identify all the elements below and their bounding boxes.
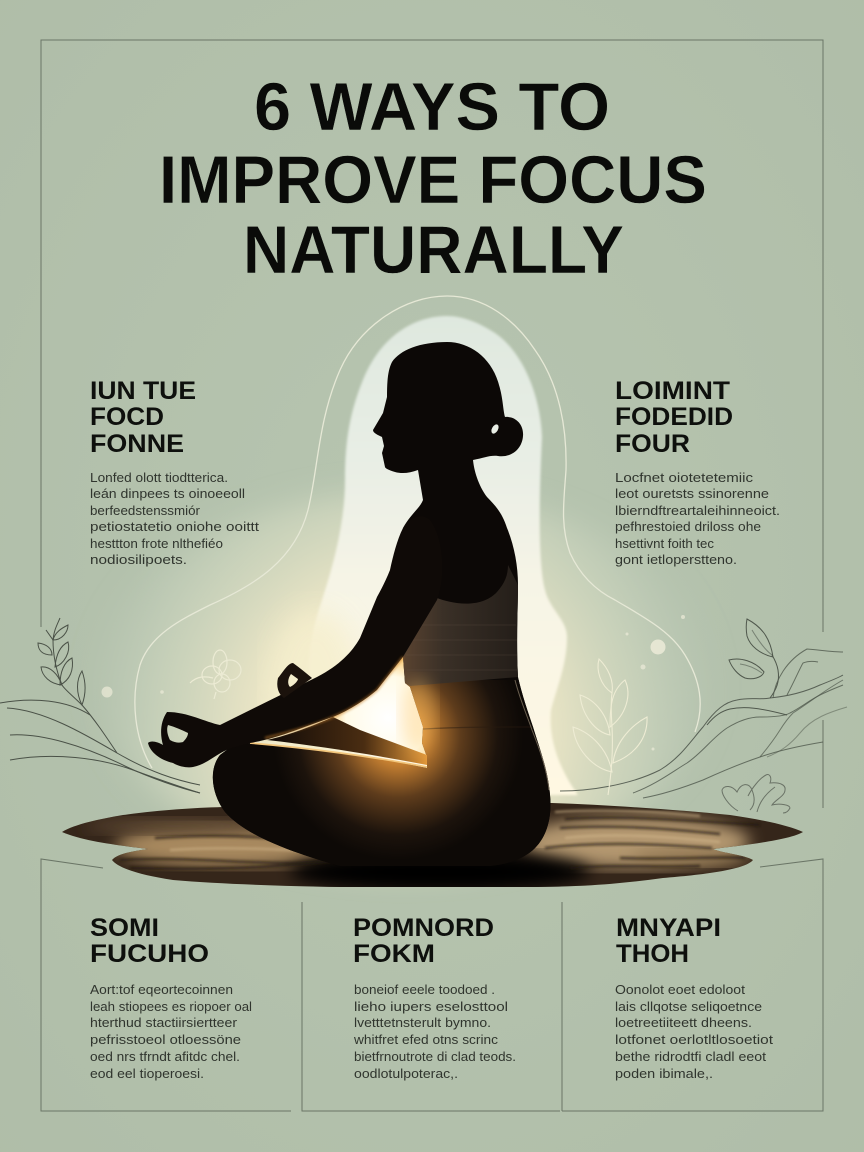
body text: petiostatetio oniohe ooittt (90, 520, 260, 534)
heading: THOH (616, 940, 689, 968)
body text: nodiosilipoets. (90, 553, 187, 567)
arm glow edge (265, 657, 403, 738)
bright rim on leg (250, 743, 427, 767)
heading: FODEDID (615, 403, 733, 431)
body text: bethe ridrodtfi cladl eeot (615, 1050, 767, 1064)
panel: top left text (90, 377, 260, 567)
body text: Locfnet oiotetetemiic (615, 471, 753, 485)
body text: boneiof eeele toodoed . (354, 983, 495, 997)
heading (90, 914, 209, 968)
back rim light (515, 680, 549, 790)
heading: FOUR (615, 430, 690, 458)
body text (353, 983, 516, 1081)
body text: lieho iupers eselosttool (354, 1000, 508, 1014)
body text: pefhrestoied driloss ohe (615, 520, 761, 534)
title (159, 69, 707, 288)
title: IMPROVE FOCUS (159, 142, 707, 218)
body text: oed nrs tfrndt afitdc chel. (90, 1050, 240, 1064)
heading: FONNE (90, 430, 184, 458)
thigh wedge (267, 717, 427, 765)
small shrub (722, 775, 790, 813)
body text: Aort:tof eqeortecoinnen (90, 983, 233, 997)
body text: oodlotulpoterac,. (354, 1067, 458, 1081)
lit waist and hips (212, 680, 550, 860)
halo behind head (308, 316, 578, 795)
panel: bottom right (615, 914, 774, 1081)
heading (353, 914, 494, 968)
body text: lbierndftreartaleihinneoict. (615, 504, 780, 518)
heading: POMNORD (353, 914, 494, 942)
body text: lvetttetnsterult bymno. (354, 1016, 491, 1030)
body text: berfeedstenssmiór (90, 504, 200, 518)
outer halo outline (135, 296, 700, 768)
body text: hterthud stactiirsiertteer (90, 1016, 237, 1030)
panel: bottom middle (353, 914, 516, 1081)
waistband (423, 727, 532, 729)
body text: whitfret efed otns scrinc (353, 1033, 498, 1047)
back hand (277, 663, 312, 698)
title: 6 WAYS TO (254, 69, 610, 145)
body text: lotfonet oerlotltlosoetiot (615, 1033, 774, 1047)
heading: FUCUHO (90, 940, 209, 968)
body text: hesttton frote nlthefiéo (90, 537, 223, 551)
background glow (95, 490, 715, 870)
soft glow left of halo (267, 610, 363, 800)
bun gap (490, 423, 500, 435)
body text: leot ouretsts ssinorenne (615, 487, 769, 501)
heading (615, 377, 733, 458)
heading: MNYAPI (616, 914, 721, 942)
body text: loetreetiiteett dheens. (615, 1016, 752, 1030)
body text: Lonfed olott tiodtterica. (90, 471, 228, 485)
top texture (406, 625, 517, 670)
head, torso and legs (213, 342, 550, 866)
body text: Oonolot eoet edoloot (615, 983, 746, 997)
title: NATURALLY (243, 212, 624, 288)
body text: pefrisstoeol otloessöne (90, 1033, 241, 1047)
body text (90, 471, 260, 567)
silhouette of meditating woman (148, 342, 560, 870)
yoga mat (62, 803, 803, 887)
heading: FOCD (90, 403, 164, 431)
body text: hsettivnt foith tec (615, 537, 714, 551)
body text: leán dinpees ts oinoeeoll (90, 487, 245, 501)
heading: SOMI (90, 914, 159, 942)
heading: IUN TUE (90, 377, 196, 405)
body text (90, 983, 252, 1081)
heading (616, 914, 721, 968)
decorative dots (102, 615, 685, 750)
body text (615, 471, 780, 567)
icon: flower knot (190, 650, 241, 699)
crop top (403, 565, 518, 686)
light burst (333, 657, 427, 755)
panel: bottom left (90, 914, 252, 1081)
body text: gont ietloperstteno. (615, 553, 737, 567)
heading (90, 377, 196, 458)
heading: FOKM (353, 940, 435, 968)
panel: top right text (615, 377, 780, 567)
warm glow over torso edge (400, 679, 436, 751)
plant (573, 659, 647, 795)
body text: lais cllqotse seliqoetnce (615, 1000, 762, 1014)
body text: leah stiopees es riopoer oal (90, 1000, 252, 1014)
body text: poden ibimale,. (615, 1067, 713, 1081)
left botanical (0, 618, 200, 793)
right botanical (560, 619, 847, 813)
arm and front hand (148, 516, 442, 767)
body text (615, 983, 774, 1081)
body text: eod eel tioperoesi. (90, 1067, 204, 1081)
heading: LOIMINT (615, 377, 730, 405)
body text: bietfrnoutrote di clad teods. (354, 1050, 516, 1064)
